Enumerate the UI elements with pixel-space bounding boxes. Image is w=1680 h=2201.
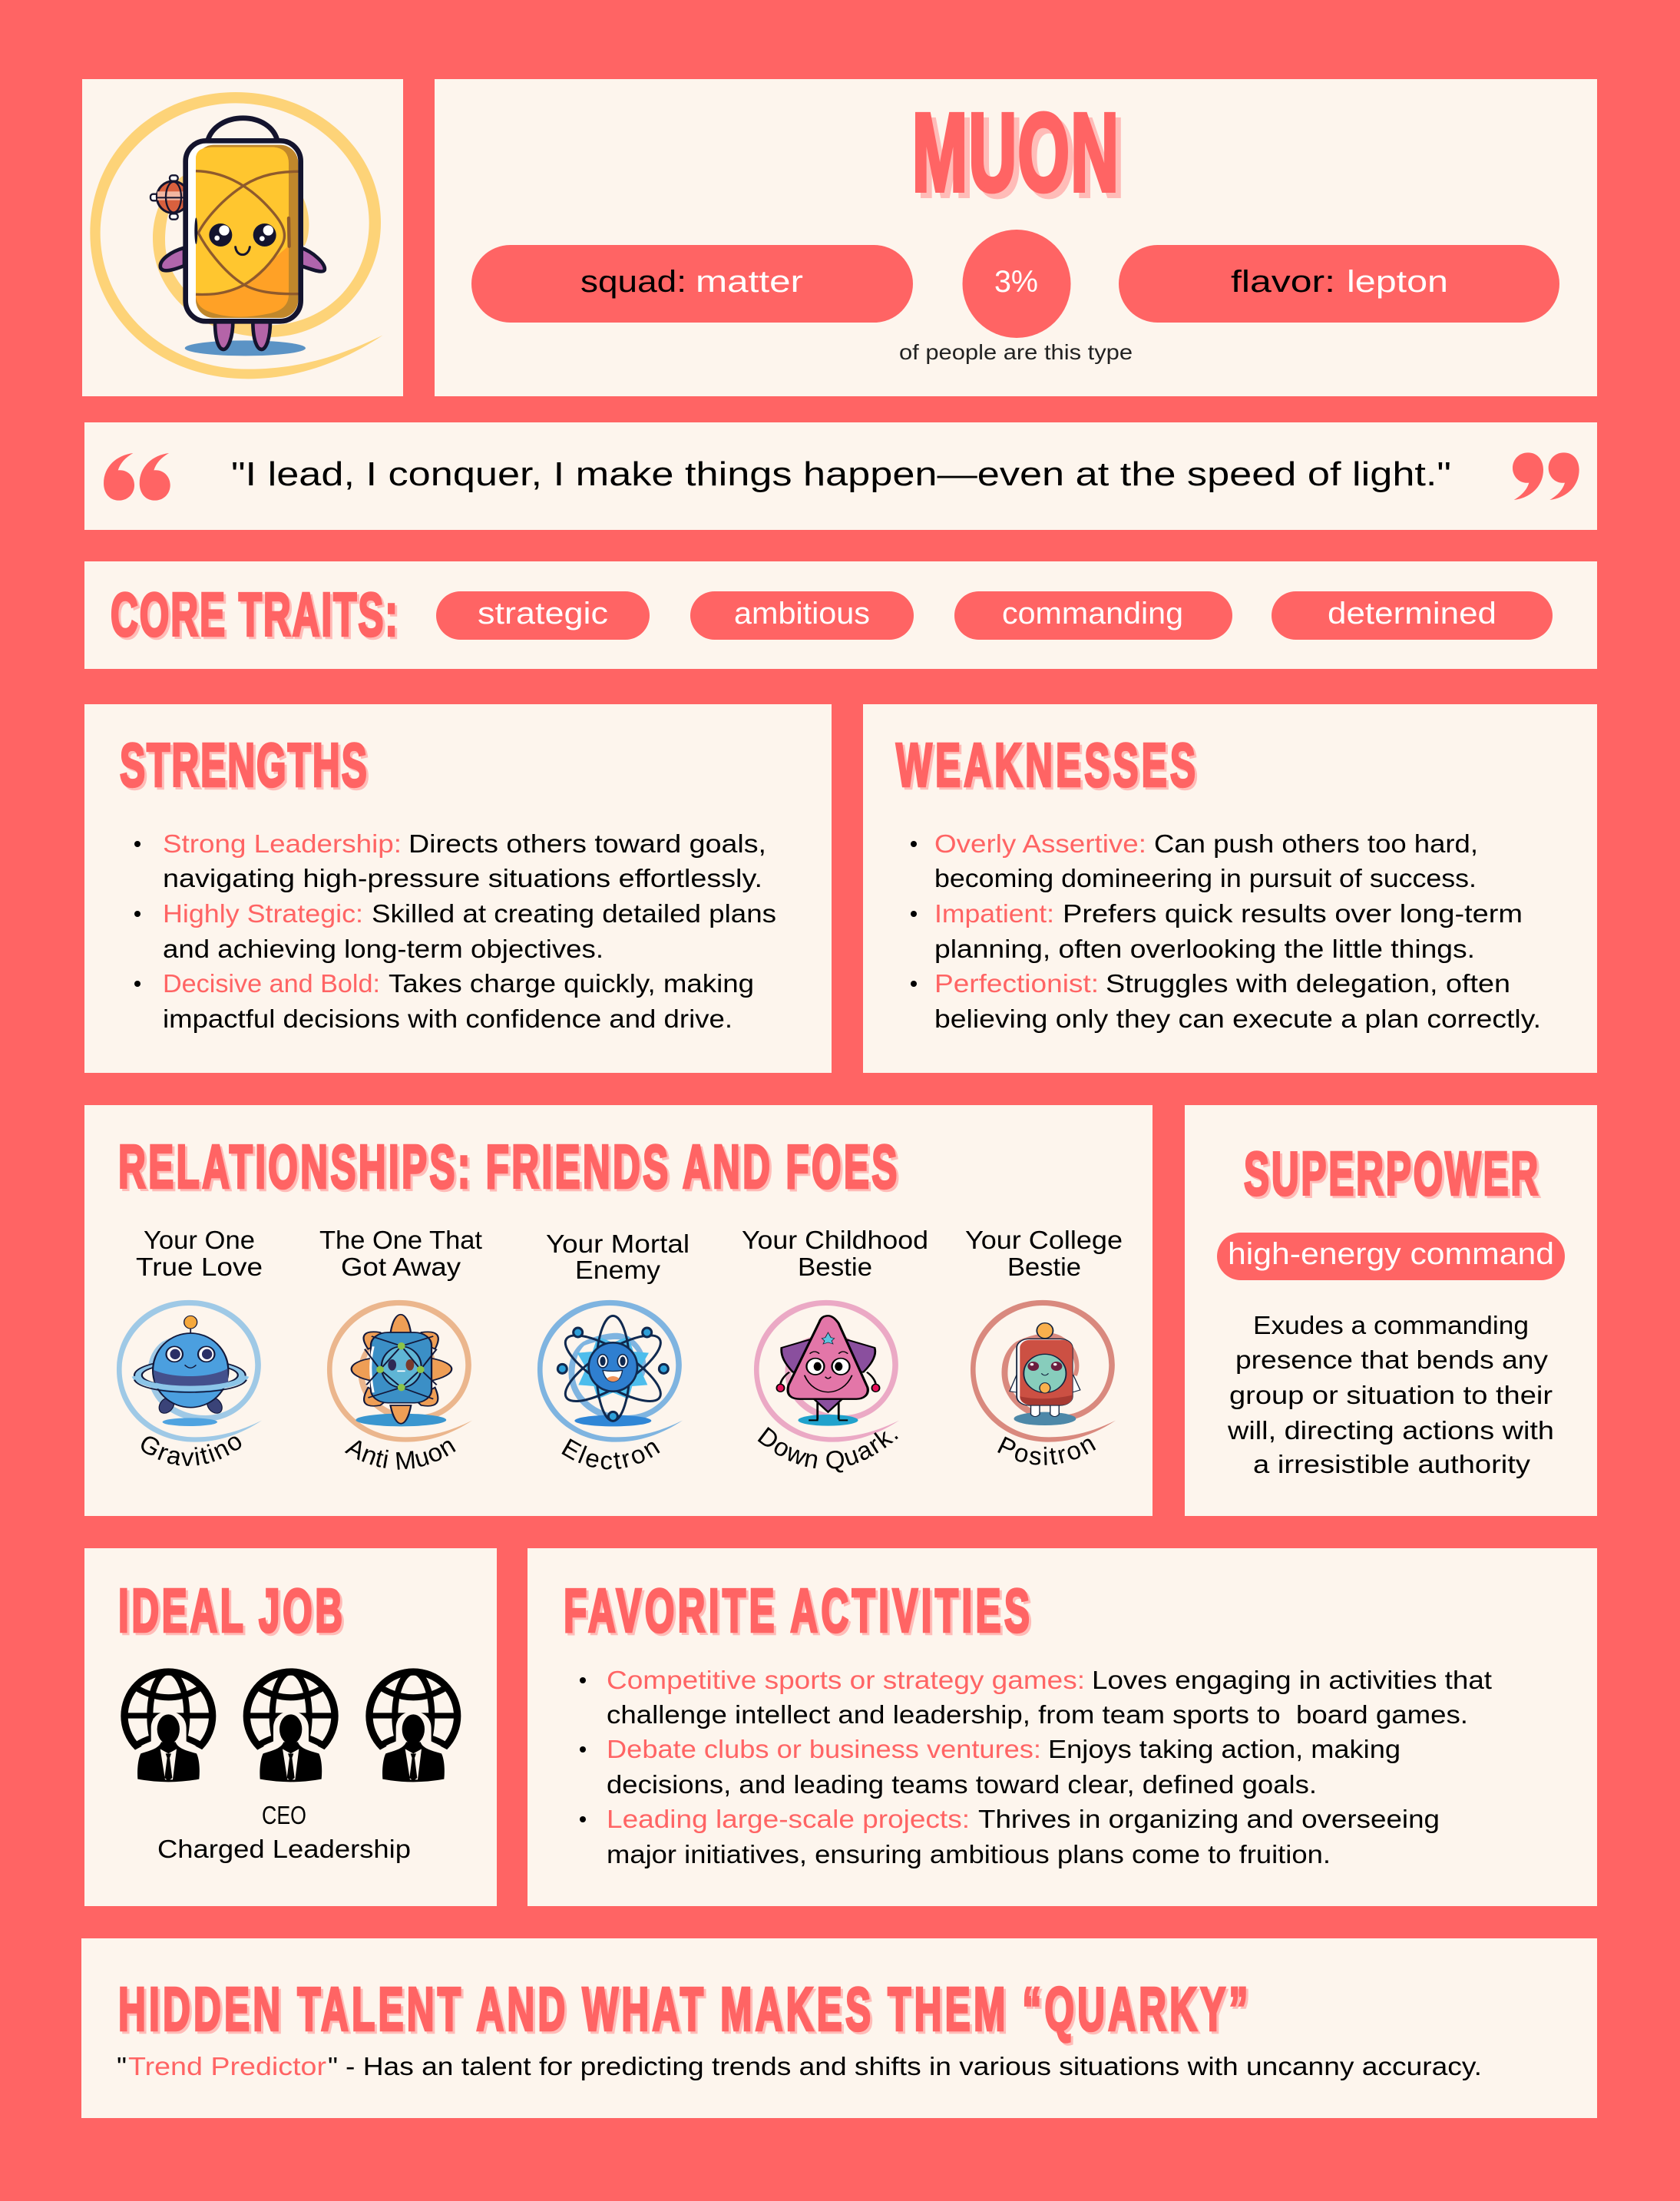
relationship: electron: Electron	[561, 1438, 660, 1470]
trait pill: commanding	[954, 591, 1232, 640]
superpower description: will, directing actions with	[1227, 1416, 1554, 1445]
heading: favorite activities: FAVORITE ACTIVITIES	[564, 1577, 1030, 1646]
icons: global executive	[124, 1672, 458, 1787]
strengths list: Decisive and Bold:	[163, 969, 380, 998]
weaknesses list	[911, 829, 1541, 1033]
flavor pill: lepton	[1347, 265, 1448, 299]
strengths list	[134, 829, 776, 1033]
job title: Charged Leadership	[157, 1835, 411, 1863]
strengths list: and achieving long-term objectives.	[163, 935, 604, 963]
panel: mascot	[82, 79, 403, 396]
relationship: electron: Enemy	[575, 1256, 661, 1284]
title: MUON	[912, 91, 1119, 215]
icon: left quotation mark	[104, 453, 170, 501]
heading: weaknesses: WEAKNESSES	[896, 732, 1196, 800]
weaknesses list: believing only they can execute a plan correctly.	[934, 1005, 1541, 1033]
relationship: down quark	[742, 1226, 928, 1473]
relationship: gravitino: Gravitino	[141, 1436, 241, 1466]
relationship: electron	[537, 1230, 690, 1470]
superpower description: presence that bends any	[1235, 1345, 1549, 1374]
weaknesses list: Impatient:	[934, 899, 1054, 928]
superpower description	[1227, 1311, 1554, 1478]
panel: hidden talent	[81, 1938, 1597, 2118]
panel: weaknesses	[863, 704, 1597, 1073]
squad pill: squad:	[580, 265, 686, 299]
activities list: challenge intellect and leadership, from team sports to board games.	[607, 1700, 1468, 1729]
weaknesses list: planning, often overlooking the little things.	[934, 935, 1475, 963]
weaknesses list: becoming domineering in pursuit of success.	[934, 864, 1477, 892]
hidden talent description: "	[328, 2052, 338, 2080]
heading: ideal job: IDEAL JOB	[118, 1577, 342, 1646]
relationship: anti muon	[319, 1226, 482, 1470]
job title	[157, 1801, 411, 1863]
trait pill: ambitious: ambitious	[734, 597, 870, 631]
superpower description: group or situation to their	[1229, 1381, 1553, 1409]
hidden talent description: "	[117, 2052, 127, 2080]
superpower description: Exudes a commanding	[1253, 1311, 1529, 1339]
weaknesses list: Struggles with delegation, often	[1106, 969, 1510, 998]
relationship: positron	[965, 1226, 1123, 1465]
flavor pill: flavor:	[1231, 265, 1335, 299]
heading: hidden talent: HIDDEN TALENT AND WHAT MAKES THEM “QUARKY”	[118, 1976, 1248, 2044]
activities list: Leading large-scale projects:	[607, 1805, 970, 1833]
strengths list: Highly Strategic:	[163, 899, 363, 928]
activities list: Loves engaging in activities that	[1092, 1666, 1492, 1694]
activities list: major initiatives, ensuring ambitious plans come to fruition.	[607, 1840, 1331, 1868]
relationship: positron: Bestie	[1007, 1253, 1081, 1281]
relationship: gravitino: True Love	[136, 1253, 263, 1281]
heading: relationships: RELATIONSHIPS: FRIENDS AND FOES	[118, 1134, 897, 1202]
strengths list: Directs others toward goals,	[408, 829, 766, 858]
trait pill: ambitious	[690, 591, 914, 640]
activities list: Thrives in organizing and overseeing	[978, 1805, 1440, 1833]
weaknesses list: Perfectionist:	[934, 969, 1099, 998]
strengths list: impactful decisions with confidence and drive.	[163, 1005, 733, 1033]
quote text: "I lead, I conquer, I make things happen—even at the speed of light."	[231, 455, 1451, 493]
activities list: Competitive sports or strategy games:	[607, 1666, 1085, 1694]
relationship: anti muon: Got Away	[341, 1253, 461, 1281]
relationship: positron: Your College	[965, 1226, 1123, 1254]
activities list: decisions, and leading teams toward clear, defined goals.	[607, 1770, 1317, 1799]
relationship: down quark: Your Childhood	[742, 1226, 928, 1254]
heading: strengths: STRENGTHS	[120, 732, 367, 800]
percentage badge: 3%	[994, 265, 1038, 299]
icon: muon mascot	[90, 92, 382, 379]
superpower description: a irresistible authority	[1253, 1450, 1531, 1478]
strengths list: Takes charge quickly, making	[389, 969, 754, 998]
hidden talent description: Trend Predictor	[128, 2052, 326, 2080]
weaknesses list: Overly Assertive:	[934, 829, 1146, 858]
strengths list: Skilled at creating detailed plans	[372, 899, 776, 928]
percentage badge	[963, 230, 1070, 338]
job title: CEO	[262, 1801, 306, 1829]
strengths list: Strong Leadership:	[163, 829, 402, 858]
strengths list: navigating high-pressure situations effortlessly.	[163, 864, 762, 892]
relationship: down quark: Bestie	[798, 1253, 872, 1281]
heading: superpower: SUPERPOWER	[1244, 1140, 1538, 1209]
panel: core traits	[84, 561, 1597, 669]
flavor pill	[1119, 245, 1559, 323]
relationship: positron: Positron	[997, 1436, 1096, 1465]
heading: core traits: CORE TRAITS:	[111, 581, 398, 650]
relationship: gravitino	[117, 1226, 263, 1466]
relationship: gravitino: Your One	[144, 1226, 255, 1254]
panel: strengths	[84, 704, 832, 1073]
activities list: Enjoys taking action, making	[1048, 1735, 1401, 1763]
relationship: electron: Your Mortal	[546, 1230, 690, 1258]
panel: superpower	[1185, 1105, 1597, 1516]
icon: right quotation mark	[1513, 452, 1579, 500]
panel: title	[435, 79, 1597, 396]
activities list	[580, 1666, 1492, 1868]
superpower pill	[1217, 1233, 1565, 1280]
percentage caption: of people are this type	[899, 340, 1133, 364]
weaknesses list: Can push others too hard,	[1154, 829, 1478, 858]
relationship: anti muon: The One That	[319, 1226, 482, 1254]
panel: relationships	[84, 1105, 1153, 1516]
relationship: down quark: Down Quark.	[757, 1427, 898, 1473]
hidden talent description: - Has an talent for predicting trends and shifts in various situations with uncanny accuracy.	[346, 2052, 1482, 2080]
squad pill: matter	[696, 265, 803, 299]
weaknesses list: Prefers quick results over long-term	[1063, 899, 1523, 928]
squad pill	[471, 245, 913, 323]
trait pill: determined	[1272, 591, 1553, 640]
panel: favorite activities	[527, 1548, 1597, 1906]
panel: ideal job	[84, 1548, 497, 1906]
trait pill: strategic: strategic	[478, 597, 608, 631]
relationship: anti muon: Anti Muon	[344, 1441, 456, 1470]
trait pill: determined: determined	[1328, 597, 1496, 631]
panel: quote	[84, 422, 1597, 530]
superpower pill: high-energy command	[1228, 1237, 1554, 1271]
trait pill: commanding: commanding	[1002, 597, 1183, 631]
trait pill: strategic	[436, 591, 650, 640]
activities list: Debate clubs or business ventures:	[607, 1735, 1041, 1763]
